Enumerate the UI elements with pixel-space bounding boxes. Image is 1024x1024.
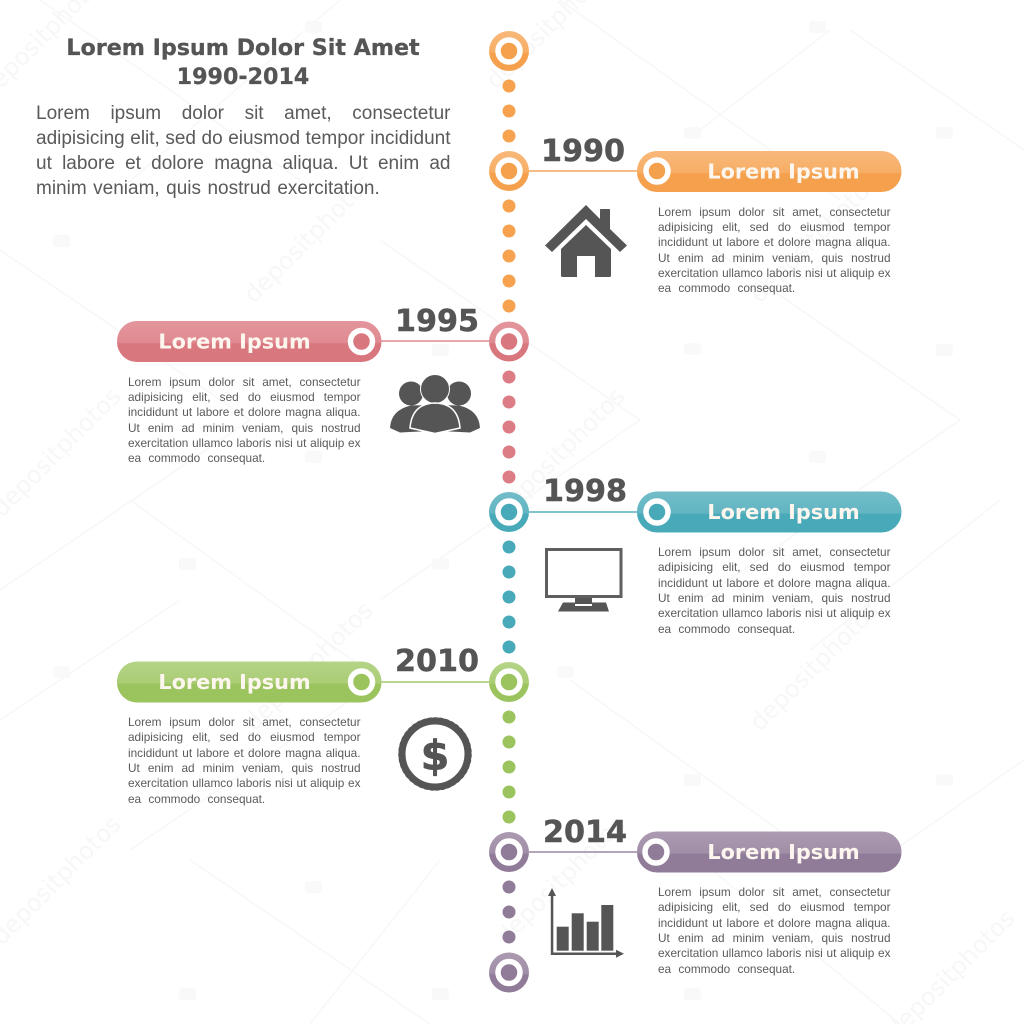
text block: 2010: ea commodo consequat.: [128, 792, 265, 806]
milestone 2010: Lorem Ipsum: [158, 670, 311, 694]
text block: 1998: adipisicing elit, sed do eiusmod tempor: [658, 560, 890, 574]
text block: 1995: ea commodo consequat.: [128, 451, 265, 465]
milestone 2014: Lorem Ipsum: [707, 840, 860, 864]
text block: 1998: Lorem ipsum dolor sit amet, consectetur: [658, 545, 890, 559]
text block: 1990: Ut enim ad minim veniam, quis nostrud: [658, 251, 890, 265]
milestone 1990: Lorem Ipsum: [707, 160, 860, 184]
watermark: depositphotos: [490, 382, 630, 522]
text block: 1990: incididunt ut labore et dolore magna aliqua.: [658, 235, 890, 249]
text block: 2010: Ut enim ad minim veniam, quis nostrud: [128, 761, 360, 775]
text block: 1990: Lorem ipsum dolor sit amet, consectetur: [658, 204, 890, 218]
text block: 2014: Lorem ipsum dolor sit amet, consectetur: [658, 885, 890, 899]
text block: 1998: Ut enim ad minim veniam, quis nostrud: [658, 591, 890, 605]
milestone 1995: [117, 304, 529, 362]
text block: 1990: [658, 204, 890, 295]
text block: 1998: exercitation ullamco laboris nisi ut aliquip ex: [658, 606, 890, 620]
watermark: depositphotos: [744, 596, 884, 736]
milestone 1995: Lorem Ipsum: [158, 330, 311, 354]
icon: bar chart: [548, 888, 624, 958]
text block: 1995: incididunt ut labore et dolore magna aliqua.: [128, 405, 360, 419]
milestone 1990: 1990: [541, 134, 625, 169]
title: Lorem Ipsum Dolor Sit Amet: [66, 35, 420, 61]
watermark: depositphotos: [490, 810, 630, 950]
text block: 1995: Lorem ipsum dolor sit amet, consectetur: [128, 374, 360, 388]
milestone 2010: 2010: [395, 644, 479, 679]
intro text block: ut labore et dolore magna aliqua. Ut enim ad: [36, 152, 450, 174]
text block: 1995: adipisicing elit, sed do eiusmod tempor: [128, 390, 360, 404]
milestone 2010: [117, 644, 529, 702]
icon: dollar coin: [399, 718, 471, 790]
text block: 1998: [658, 545, 890, 636]
text block: 2010: adipisicing elit, sed do eiusmod tempor: [128, 730, 360, 744]
timeline: vertical dotted spine: [502, 80, 516, 944]
text block: 1995: Ut enim ad minim veniam, quis nostrud: [128, 421, 360, 435]
text block: 2014: incididunt ut labore et dolore magna aliqua.: [658, 916, 890, 930]
title: [66, 35, 420, 90]
icon: house: [545, 205, 627, 277]
text block: 2014: exercitation ullamco laboris nisi ut aliquip ex: [658, 946, 890, 960]
intro text block: adipisicing elit, sed do eiusmod tempor incididunt: [36, 128, 450, 148]
icon: people: [390, 374, 480, 434]
start node: [489, 31, 529, 71]
text block: 1998: incididunt ut labore et dolore magna aliqua.: [658, 576, 890, 590]
milestone 1998: Lorem Ipsum: [707, 500, 860, 524]
icon: monitor: [546, 550, 621, 612]
text block: 2014: Ut enim ad minim veniam, quis nostrud: [658, 931, 890, 945]
intro text block: minim veniam, quis nostrud exercitation.: [36, 178, 380, 198]
watermark: depositphotos: [238, 168, 378, 308]
intro text block: Lorem ipsum dolor sit amet, consectetur: [36, 102, 450, 124]
text block: 1995: [128, 374, 360, 465]
text block: 1990: adipisicing elit, sed do eiusmod tempor: [658, 220, 890, 234]
text block: 2014: ea commodo consequat.: [658, 962, 795, 976]
text block: 2010: exercitation ullamco laboris nisi ut aliquip ex: [128, 776, 360, 790]
text block: 2010: Lorem ipsum dolor sit amet, consectetur: [128, 715, 360, 729]
text block: 2014: [658, 885, 890, 976]
icon: dollar coin: $: [421, 732, 449, 780]
milestone 1990: [489, 134, 902, 192]
text block: 1995: exercitation ullamco laboris nisi ut aliquip ex: [128, 436, 360, 450]
watermark: depositphotos: [238, 596, 378, 736]
text block: 2010: [128, 715, 360, 806]
intro text block: [36, 102, 450, 198]
milestone 2014: [489, 815, 902, 872]
title: 1990-2014: [177, 64, 309, 90]
watermark: depositphotos: [744, 168, 884, 308]
milestone 1998: [489, 474, 902, 532]
text block: 1990: ea commodo consequat.: [658, 281, 795, 295]
milestone 1995: 1995: [395, 304, 479, 339]
milestone 2014: 2014: [543, 815, 627, 850]
end node: [489, 952, 529, 992]
text block: 2014: adipisicing elit, sed do eiusmod tempor: [658, 900, 890, 914]
text block: 1998: ea commodo consequat.: [658, 622, 795, 636]
milestone 1998: 1998: [543, 474, 627, 509]
text block: 1990: exercitation ullamco laboris nisi ut aliquip ex: [658, 266, 890, 280]
text block: 2010: incididunt ut labore et dolore magna aliqua.: [128, 746, 360, 760]
